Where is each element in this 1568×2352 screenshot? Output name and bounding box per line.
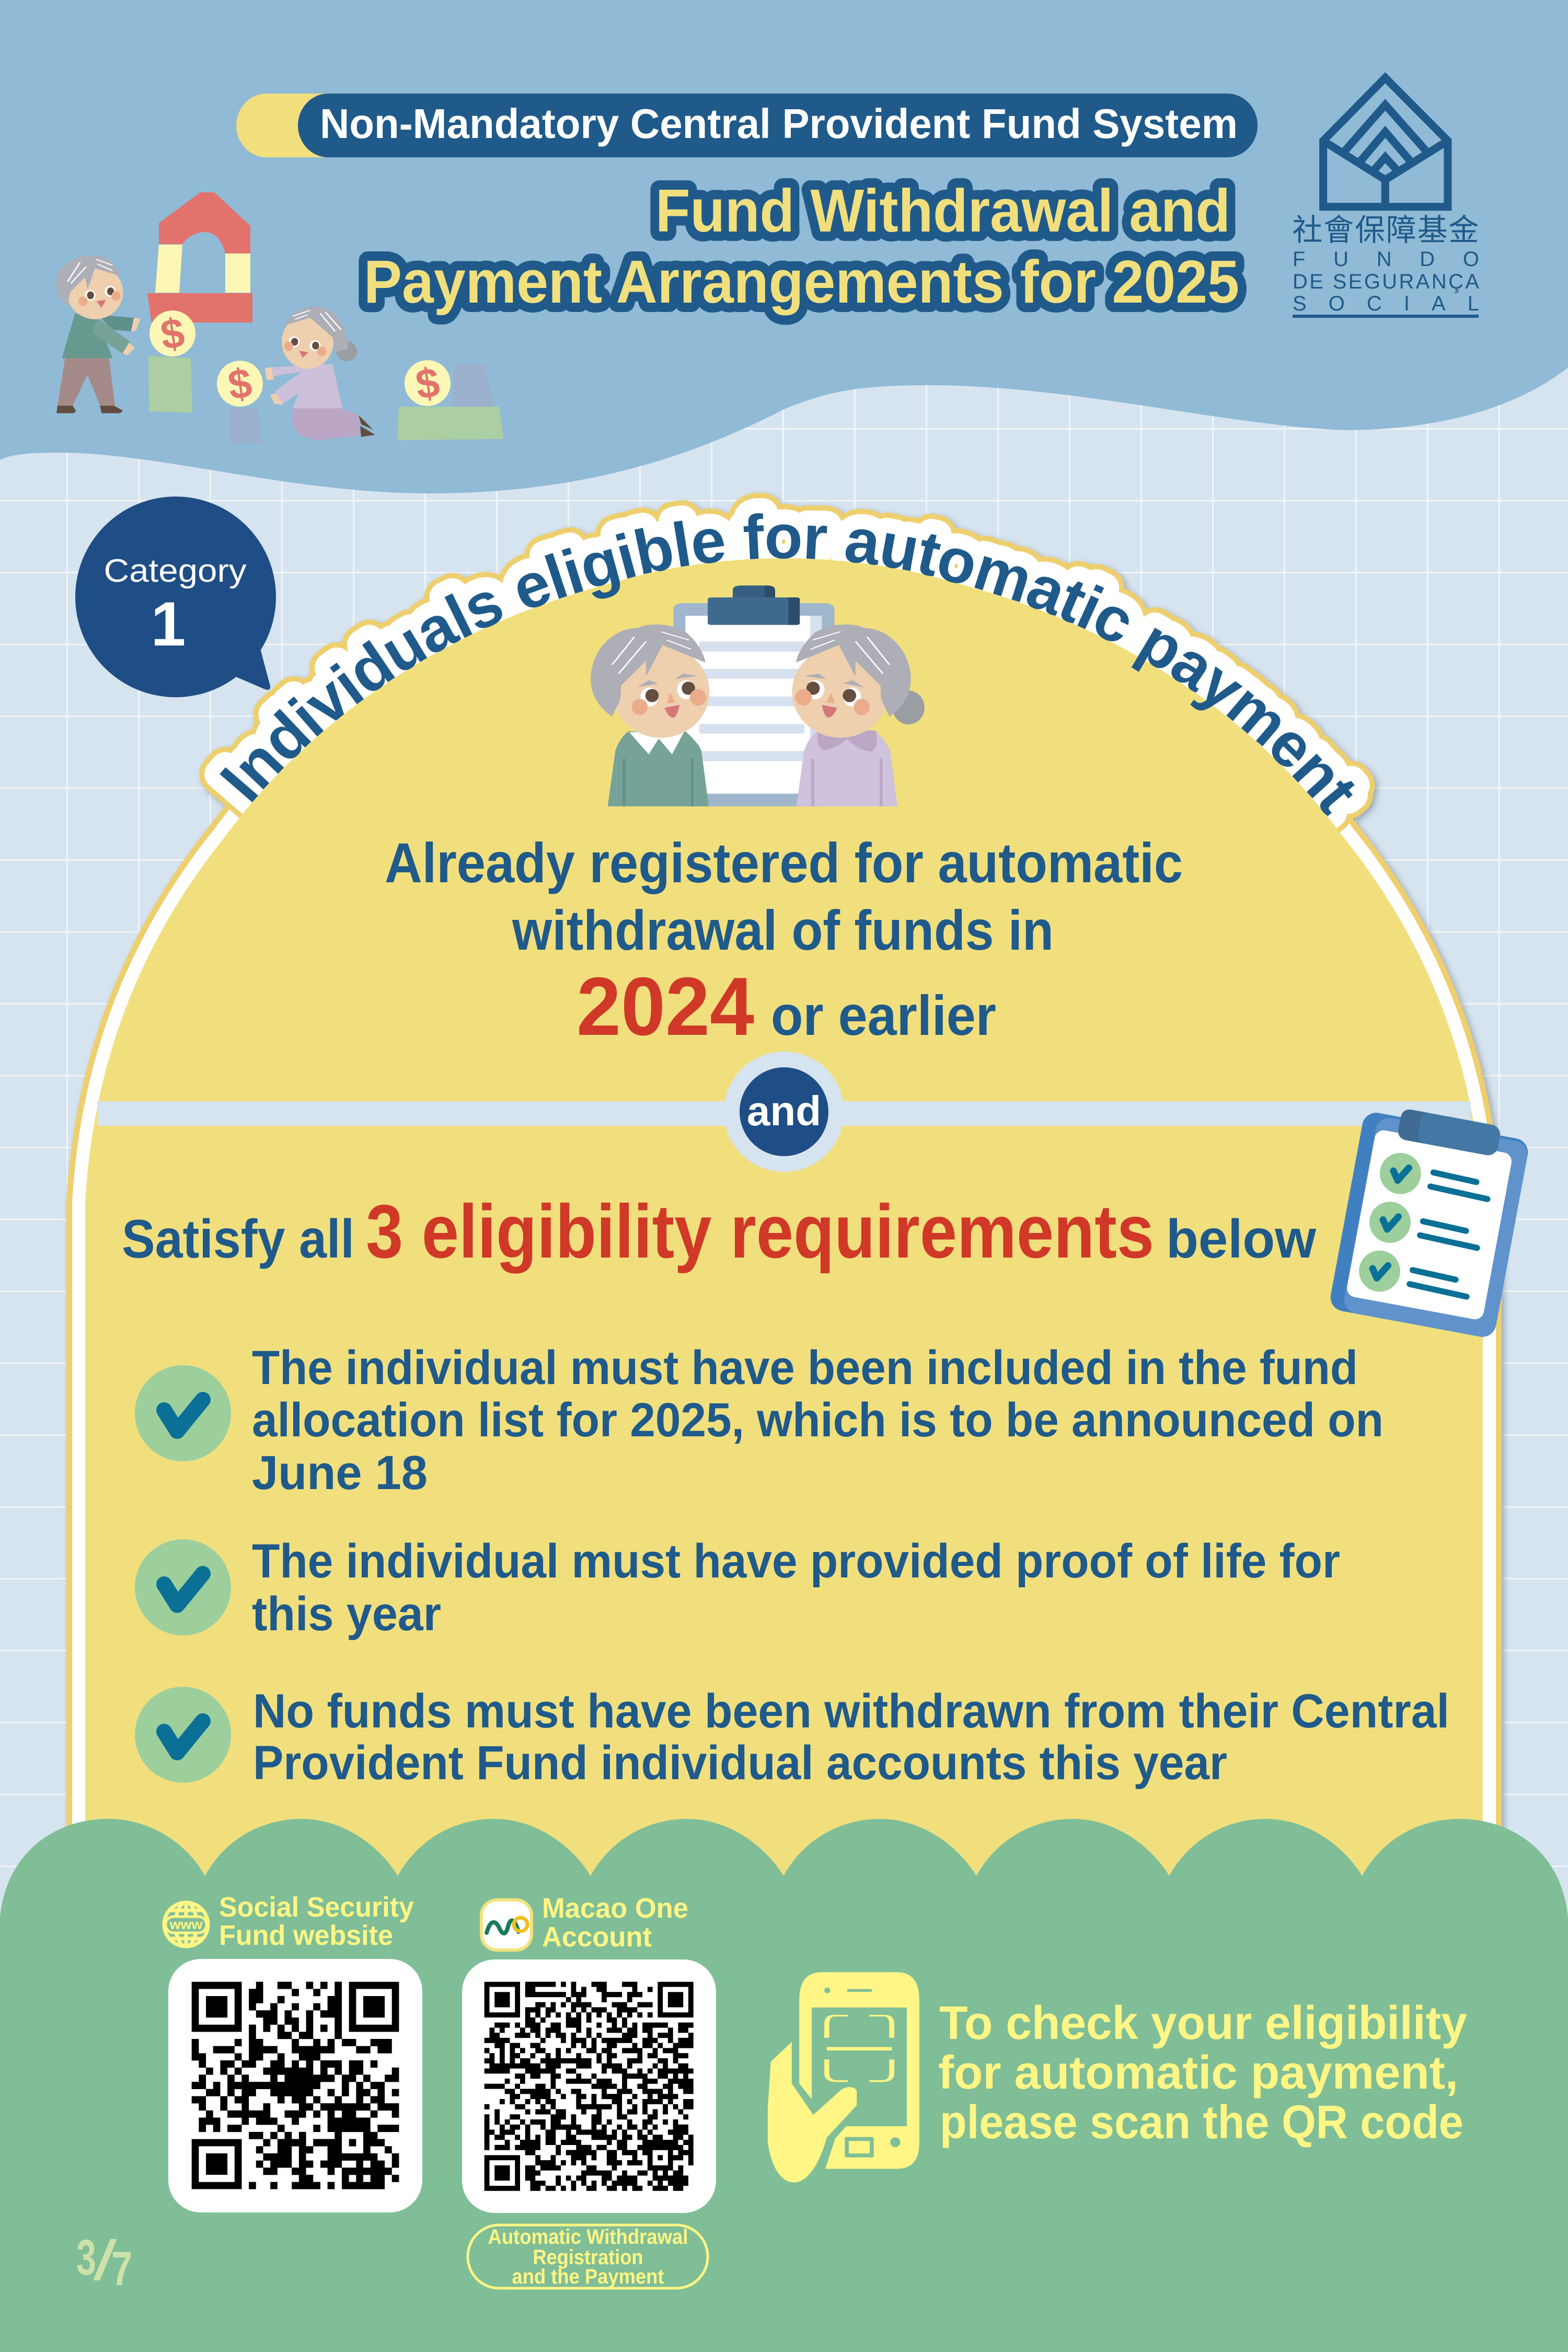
call to action text: please scan the QR code xyxy=(940,2096,1463,2149)
page number: 7 xyxy=(111,2242,132,2296)
icon: www globe: www xyxy=(169,1917,203,1932)
heading: requirements: Satisfy all xyxy=(122,1209,354,1270)
label: Macao One Account: Account xyxy=(542,1921,652,1953)
logo: Fundo de Segurança Social: SOCIAL xyxy=(1293,292,1479,315)
requirement 1: allocation list for 2025, which is to be announced on xyxy=(252,1393,1383,1447)
requirement 3: Provident Fund individual accounts this year xyxy=(253,1736,1227,1790)
requirement 3 xyxy=(135,1685,1449,1790)
icon: www globe xyxy=(164,1903,208,1946)
call to action text: for automatic payment, xyxy=(938,2047,1458,2099)
heading: registration condition: Already registered for automatic xyxy=(385,831,1183,894)
icon: dollar coins xyxy=(149,309,451,409)
requirement 2 xyxy=(135,1535,1340,1641)
category speech bubble: Category xyxy=(103,553,247,589)
page number xyxy=(76,2229,132,2296)
illustration: toy blocks xyxy=(147,192,504,444)
QR code: Social Security Fund website xyxy=(168,1959,422,2212)
header pill: Non-Mandatory Central Provident Fund System xyxy=(320,100,1238,147)
logo: Fundo de Segurança Social xyxy=(1292,78,1479,318)
header wave xyxy=(0,0,1568,493)
icon: Macao One Account app xyxy=(481,1900,532,1950)
label: Social Security Fund website xyxy=(219,1892,414,1951)
header pill xyxy=(236,94,1258,157)
category speech bubble xyxy=(75,497,276,697)
icon: tilted checklist clipboard xyxy=(1328,1101,1532,1339)
requirement 3: No funds must have been withdrawn from their Central xyxy=(253,1685,1449,1738)
QR code: Macao One Account xyxy=(462,1959,716,2213)
category speech bubble: 1 xyxy=(151,589,186,659)
arch shadow: Individuals eligible for automatic payment xyxy=(199,492,1381,824)
requirement 1 xyxy=(135,1341,1383,1500)
outlined pill: Automatic Withdrawal Registration and the Payment: Registration xyxy=(533,2246,643,2269)
illustration: elderly couple with clipboard xyxy=(591,585,925,806)
label: Social Security Fund website: Social Security xyxy=(219,1892,414,1923)
illustration: elderly woman with blocks xyxy=(265,307,375,440)
panel: eligibility arch: Individuals eligible for automatic payment xyxy=(199,493,1375,833)
main title: Payment Arrangements for 2025 xyxy=(364,248,1239,316)
label: Macao One Account: Macao One xyxy=(542,1893,688,1924)
call to action text xyxy=(938,1997,1467,2149)
label: Macao One Account xyxy=(542,1893,688,1953)
logo: Fundo de Segurança Social: FUNDO xyxy=(1293,248,1479,271)
panel: eligibility arch xyxy=(66,493,1502,1876)
outlined pill: Automatic Withdrawal Registration and the Payment xyxy=(468,2225,708,2288)
heading: registration condition: withdrawal of funds in xyxy=(512,898,1054,962)
requirement 2: this year xyxy=(252,1587,441,1641)
footer scalloped panel xyxy=(0,1819,1568,2352)
requirement 2: The individual must have provided proof of life for xyxy=(252,1535,1340,1588)
curved heading: Individuals eligible for automatic payment xyxy=(220,513,1355,816)
logo: Fundo de Segurança Social: DE SEGURANÇA xyxy=(1293,270,1479,293)
and badge: and xyxy=(747,1088,821,1134)
and badge xyxy=(724,1052,844,1172)
main title xyxy=(364,177,1239,316)
requirement 1: June 18 xyxy=(252,1446,428,1500)
icon: dollar coins: $ xyxy=(158,309,187,359)
heading: registration condition: or earlier xyxy=(771,984,996,1047)
heading: registration condition: 2024 xyxy=(577,961,754,1053)
label: Social Security Fund website: Fund website xyxy=(219,1920,393,1951)
heading: registration condition xyxy=(385,831,1183,1053)
icon: dollar coins: $ xyxy=(413,359,442,408)
outlined pill: Automatic Withdrawal Registration and the Payment: and the Payment xyxy=(512,2265,664,2288)
call to action text: To check your eligibility xyxy=(939,1997,1467,2049)
logo: Fundo de Segurança Social: 社會保障基金 xyxy=(1292,205,1479,249)
divider band xyxy=(97,1101,1471,1126)
illustration: elderly man stacking blocks xyxy=(56,256,141,413)
icon: hand holding phone with QR scan xyxy=(768,1972,919,2183)
icon: dollar coins: $ xyxy=(225,359,255,409)
page number: / xyxy=(93,2229,117,2292)
page number: 3 xyxy=(76,2230,96,2286)
outlined pill: Automatic Withdrawal Registration and the Payment: Automatic Withdrawal xyxy=(488,2226,688,2249)
panel: eligibility arch: Individuals eligible for automatic payment xyxy=(204,498,1370,828)
heading: requirements: below xyxy=(1166,1209,1317,1270)
main title: Fund Withdrawal and xyxy=(655,177,1230,245)
heading: requirements: 3 eligibility requirements xyxy=(366,1189,1154,1274)
requirement 1: The individual must have been included in the fund xyxy=(252,1341,1358,1394)
